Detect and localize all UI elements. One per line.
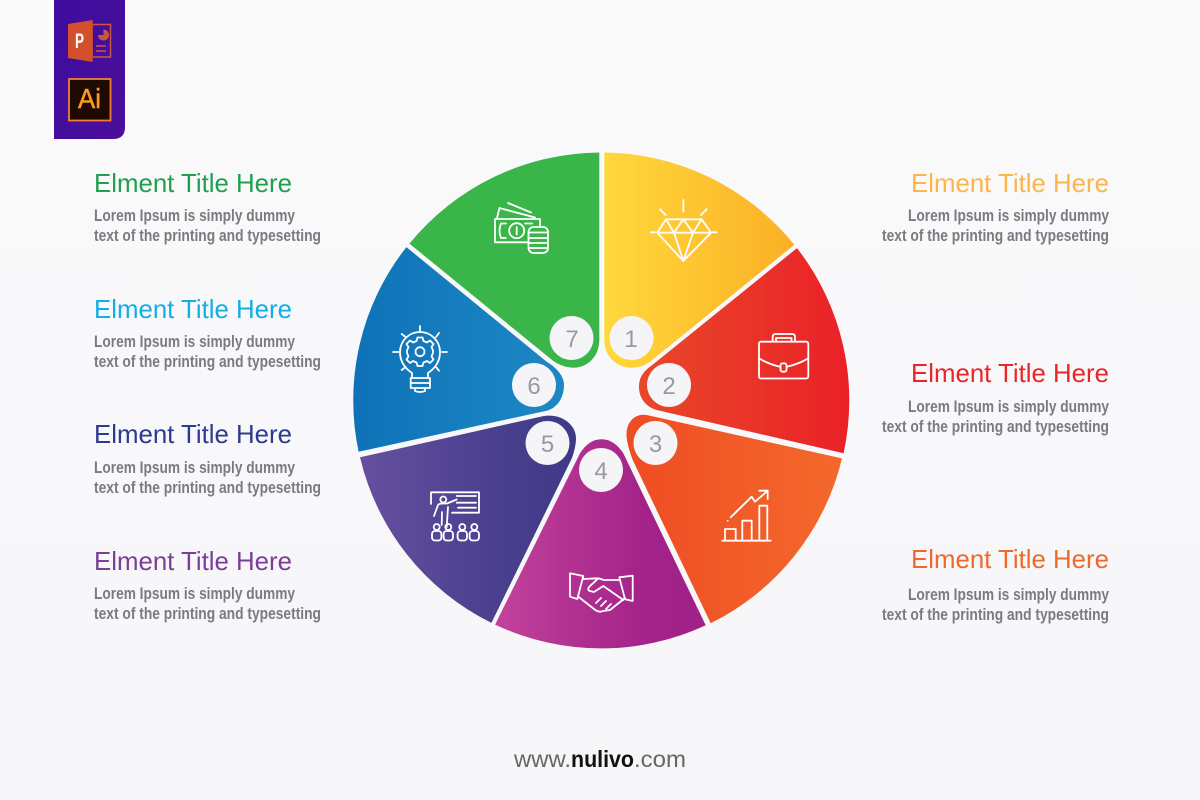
number 5: 5 [541,431,554,458]
right text block: amber: Lorem Ipsum is simply dummy [908,207,1110,225]
right text block: orange [882,544,1110,624]
right text block: amber: Elment Title Here [911,168,1109,198]
left text block: purple: text of the printing and typesetting [94,605,321,623]
footer website [513,746,686,772]
footer website: nulivo [571,746,634,772]
right text block: red: text of the printing and typesetting [882,418,1109,436]
segment 6: blue [353,247,564,452]
left text block: navy: text of the printing and typesetting [94,479,321,497]
number 4: 4 [594,458,608,485]
circular diagram [353,152,849,648]
left text block: cyan [94,294,321,371]
left text block: green: Elment Title Here [94,168,292,198]
segment 4: magenta [495,439,706,648]
icon: growth chart [722,491,771,541]
left text block: cyan: Elment Title Here [94,294,292,324]
left text block: green: text of the printing and typesetting [94,227,321,245]
left text block: purple: Lorem Ipsum is simply dummy [94,585,296,603]
left text block: purple: Elment Title Here [94,546,292,576]
number 6: 6 [527,373,541,400]
number 1: 1 [624,326,638,353]
number 6 [512,363,556,407]
right text block: amber: text of the printing and typesetting [882,227,1109,245]
number 3: 3 [649,431,662,458]
segment 2: red [639,248,849,453]
number 1 [610,316,654,360]
icon: Illustrator: Ai [78,83,101,114]
right text block: amber [882,168,1110,245]
icon: briefcase [759,334,808,378]
number 3 [634,421,678,465]
right text block: red: Elment Title Here [911,358,1109,388]
number 7: 7 [565,326,579,353]
left text block: navy: Elment Title Here [94,419,292,449]
icon: handshake [570,573,633,612]
number 2 [647,363,691,407]
right text block: orange: Elment Title Here [911,544,1109,574]
number 4 [579,448,623,492]
footer website: www. [513,746,571,772]
segment 7: green [409,152,599,368]
right text block: red [882,358,1110,436]
icon: PowerPoint: P [75,30,84,53]
left text block: navy [94,419,321,497]
left text block: green [94,168,321,245]
icon: lightbulb with gear [393,326,447,392]
right text block: orange: Lorem Ipsum is simply dummy [908,586,1110,604]
number 2: 2 [662,373,676,400]
right text block: red: Lorem Ipsum is simply dummy [908,398,1110,416]
footer website: .com [634,746,686,772]
left text block: cyan: Lorem Ipsum is simply dummy [94,333,296,351]
number 7 [550,316,594,360]
segment 3: orange [626,415,842,623]
icon: presentation [431,492,479,540]
icon: diamond [651,200,717,261]
left text block: navy: Lorem Ipsum is simply dummy [94,459,296,477]
left text block: cyan: text of the printing and typesetting [94,353,321,371]
icon: money and coins [495,203,548,253]
segment 1: yellow [604,152,794,368]
segment 5: purple [360,416,576,623]
number 5 [526,421,570,465]
left text block: purple [94,546,321,623]
right text block: orange: text of the printing and typesetting [882,606,1109,624]
left text block: green: Lorem Ipsum is simply dummy [94,207,296,225]
software badge [54,0,125,139]
